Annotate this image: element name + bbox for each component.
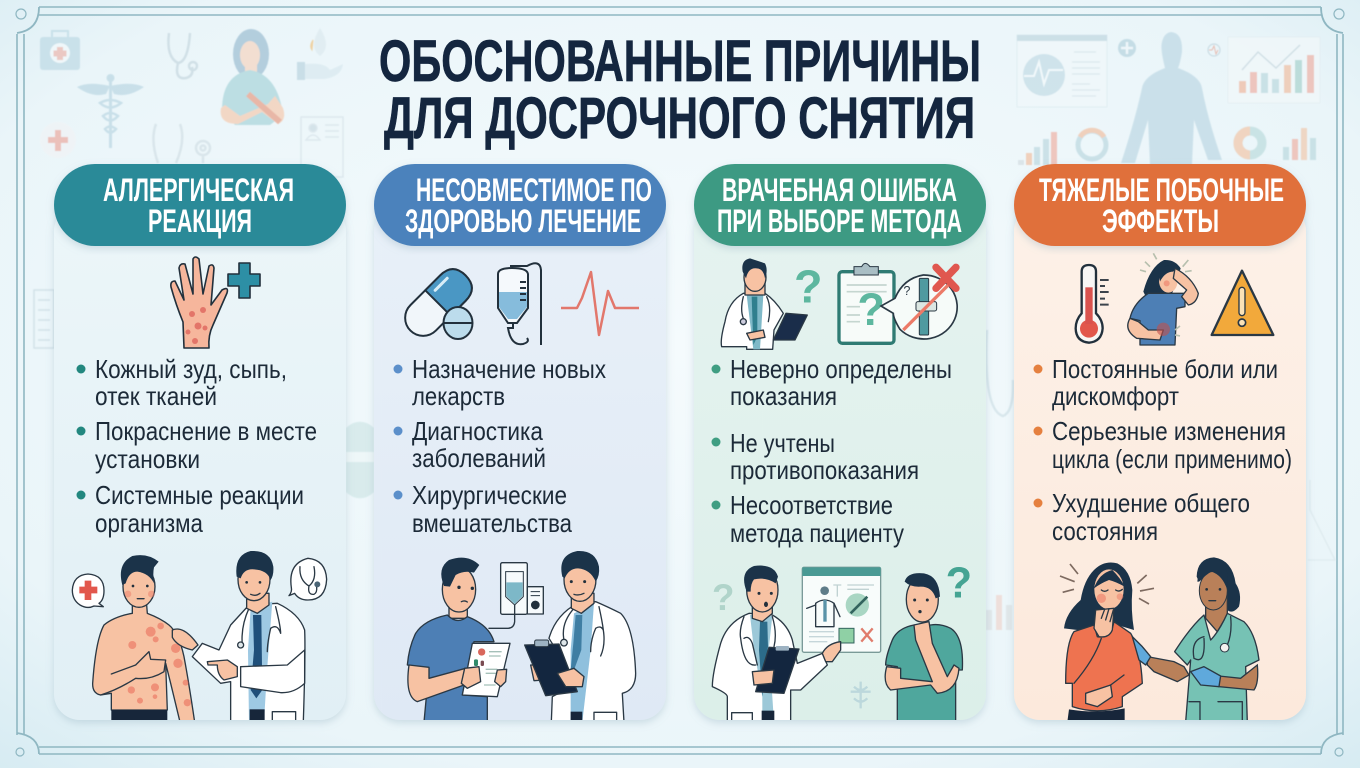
- bullet list: Не учтены: [730, 428, 835, 458]
- question mark left: ?: [712, 577, 734, 618]
- bullet list: заболеваний: [412, 443, 546, 473]
- icon: body silhouette: [1121, 32, 1222, 165]
- illustration: doctor and patient discussing: [407, 551, 636, 723]
- bullet list: Серьезные изменения: [1052, 416, 1286, 446]
- title: ДЛЯ ДОСРОЧНОГО СНЯТИЯ: [384, 86, 975, 151]
- bullet list: Покраснение в месте: [95, 416, 317, 446]
- heading pill: РЕАКЦИЯ: [148, 203, 252, 239]
- icon: stethoscope top: [168, 33, 197, 78]
- card body: [54, 205, 346, 720]
- icon: heartbeat line: [561, 272, 639, 335]
- chart: donut left: [1078, 130, 1106, 159]
- bullet list: организма: [95, 508, 203, 538]
- bullet list: Хирургические: [412, 480, 567, 510]
- bullet list: лекарств: [412, 381, 505, 411]
- bullet list: метода пациенту: [730, 518, 904, 548]
- bullet list: Неверно определены: [730, 354, 952, 384]
- bullet list: [1034, 354, 1292, 546]
- bullet list: Кожный зуд, сыпь,: [95, 354, 287, 384]
- doctor: [525, 551, 636, 723]
- icon: side clipboard: [34, 290, 54, 348]
- patient: [93, 555, 195, 722]
- panel: monitor with pulse: [1017, 35, 1107, 107]
- heading pill: НЕСОВМЕСТИМОЕ ПО: [416, 172, 652, 208]
- bullet list: вмешательства: [412, 508, 572, 538]
- bullet list: дискомфорт: [1052, 381, 1179, 411]
- screen: [802, 567, 881, 652]
- icon: flask: [1308, 480, 1335, 560]
- panel: medical error: [694, 164, 986, 723]
- bullet list: [394, 354, 606, 538]
- nurse: [1132, 557, 1259, 722]
- icon: first aid kit: [40, 31, 80, 70]
- title: ОБОСНОВАННЫЕ ПРИЧИНЫ: [379, 29, 981, 94]
- doctor: [712, 566, 841, 723]
- icon: crossed-out method circle: [881, 267, 957, 339]
- panel: severe side effects: [1014, 164, 1306, 722]
- icon: crossed-out method circle: ?: [903, 284, 910, 298]
- bullet list: отек тканей: [95, 381, 217, 411]
- heading pill: ЗДОРОВЬЮ ЛЕЧЕНИЕ: [405, 203, 641, 239]
- icons: thermometer, woman, warning: [1076, 253, 1273, 345]
- faded medical background icons, right: [986, 32, 1335, 630]
- bullet list: установки: [95, 444, 200, 474]
- chart: donut right: [1238, 131, 1262, 155]
- faded caduceus: [851, 682, 871, 708]
- IV device: [489, 563, 543, 628]
- icon: woman with rash: [221, 29, 284, 125]
- pain lines: [1060, 564, 1154, 604]
- heading pill: ЭФФЕКТЫ: [1102, 203, 1219, 239]
- patient: [885, 573, 962, 722]
- bar chart: growth: [1228, 37, 1320, 103]
- heading pill: [374, 164, 666, 246]
- heading pill: [54, 164, 346, 246]
- title: [379, 29, 981, 151]
- icon: warning triangle: [1212, 271, 1273, 335]
- card body: [694, 205, 986, 720]
- panel: incompatible treatment: [374, 164, 666, 723]
- bullet list: состояния: [1052, 516, 1158, 546]
- icon: doctor with question mark: [721, 258, 822, 349]
- bullet list: Системные реакции: [95, 480, 304, 510]
- card body: [374, 205, 666, 720]
- icon: plus badge: [1118, 39, 1136, 57]
- icon: large cross circle: [346, 422, 374, 498]
- icon: hand with drop: [297, 28, 343, 80]
- question mark right: ?: [946, 560, 972, 608]
- icon: stethoscope behind panels: [986, 330, 1013, 416]
- bar chart: small left: [1018, 132, 1057, 165]
- bar chart: behind panels: [986, 595, 1012, 630]
- icon: hand with rash and cross: [171, 257, 260, 348]
- icon: red cross: [40, 122, 76, 158]
- bullet list: Диагностика: [412, 416, 543, 446]
- illustration: doctor examining patient with rash: [72, 551, 327, 723]
- bar chart: small right: [1283, 128, 1316, 160]
- illustration: doctor explaining on screen: [712, 560, 972, 723]
- unwell woman: [1064, 562, 1142, 722]
- icon: patient card: [301, 117, 343, 177]
- icon: caduceus: [77, 74, 144, 148]
- icon: small pulse badge: [1208, 44, 1220, 56]
- icon: capsule and pill: [398, 263, 478, 343]
- bullet list: Ухудшение общего: [1052, 488, 1250, 518]
- bullet list: противопоказания: [730, 455, 919, 485]
- doctor: [172, 551, 305, 723]
- heading pill: ПРИ ВЫБОРЕ МЕТОДА: [717, 203, 962, 239]
- bullet list: [76, 354, 317, 538]
- bullet list: Постоянные боли или: [1052, 354, 1278, 384]
- patient: [407, 558, 510, 722]
- icon: woman with headache: [1128, 253, 1198, 345]
- icons: doctor, clipboard, crossed-out method: [721, 258, 957, 349]
- icon: clipboard with question mark: ?: [857, 284, 885, 335]
- bullet list: Несоответствие: [730, 490, 893, 520]
- icon: clipboard with question mark: [839, 263, 894, 343]
- bullet list: [712, 354, 952, 548]
- heading pill: АЛЛЕРГИЧЕСКАЯ: [103, 172, 294, 208]
- bullet list: показания: [730, 381, 837, 411]
- panel: allergic reaction: [54, 164, 346, 723]
- card body: [1014, 205, 1306, 720]
- icon: doctor with question mark: ?: [794, 261, 822, 313]
- icon: thermometer: [1076, 265, 1109, 343]
- speech bubble with stethoscope: [289, 558, 327, 600]
- speech bubble with cross: [72, 574, 104, 607]
- heading pill: [694, 164, 986, 246]
- heading pill: ВРАЧЕБНАЯ ОШИБКА: [722, 172, 957, 208]
- icon: IV bag: [498, 263, 541, 345]
- illustration: nurse comforting unwell woman: [1060, 557, 1259, 722]
- heading pill: [1014, 164, 1306, 246]
- bullet list: Назначение новых: [412, 354, 606, 384]
- icon: stethoscope lower: [153, 124, 210, 163]
- bullet list: цикла (если применимо): [1052, 444, 1292, 474]
- faded medical background icons, left: [34, 28, 374, 498]
